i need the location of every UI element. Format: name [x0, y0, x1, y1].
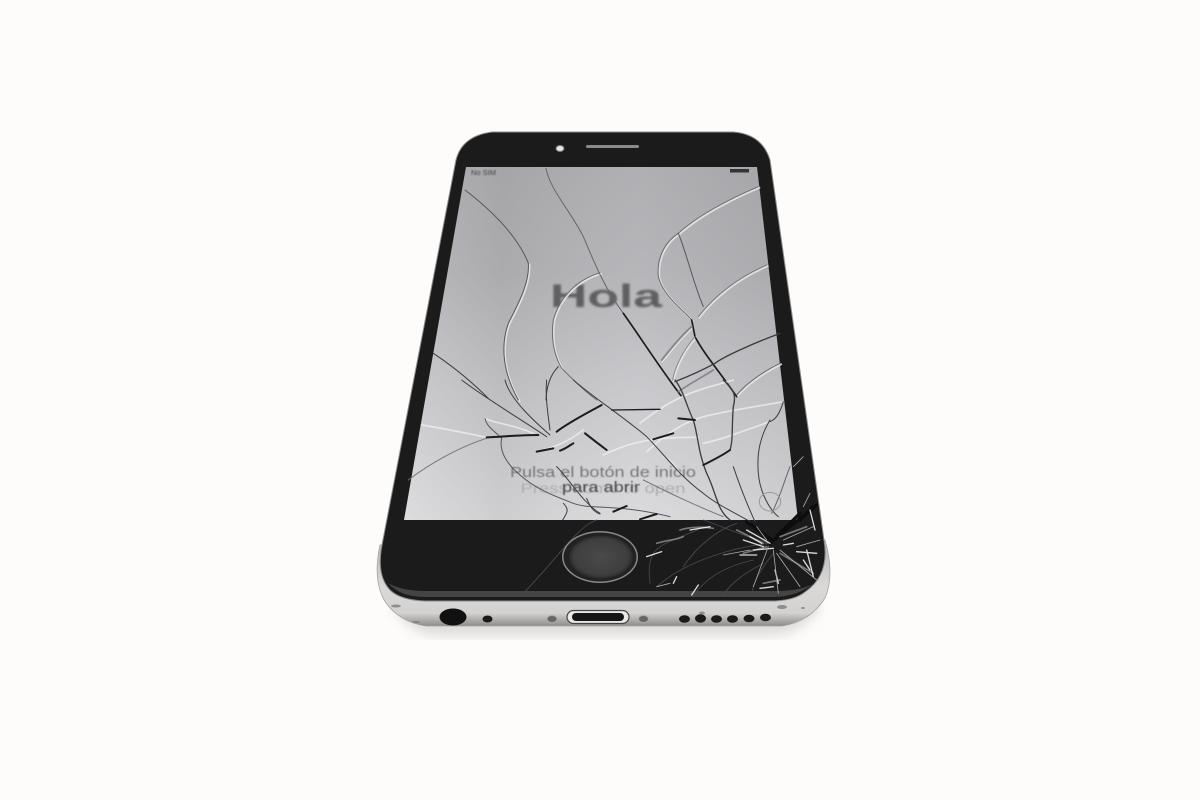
lower glass edge [388, 583, 813, 597]
unlock text line 1: Pulsa el botón de inicio [510, 464, 696, 481]
battery [730, 169, 749, 172]
cracks on lower bezel [520, 520, 773, 597]
left screw [547, 616, 557, 622]
greeting text: Hola [550, 278, 662, 314]
phone shadow [392, 600, 822, 636]
unlock text line 2: para abrir [562, 480, 640, 496]
status bar text: No SIM [471, 168, 496, 177]
dark thin cracks [408, 380, 790, 522]
headphone jack [440, 608, 466, 626]
metal body [377, 540, 830, 626]
bottom port row [391, 604, 805, 626]
cracks upper screen [433, 168, 781, 401]
microphone hole [482, 616, 492, 622]
glass front [380, 132, 825, 601]
shatter impact point [647, 457, 820, 595]
ghost unlock text: Press home to open [520, 480, 686, 496]
dark heavy cracks [487, 405, 730, 519]
charging port [567, 610, 629, 624]
screen [404, 167, 798, 520]
home button [562, 531, 638, 583]
camera [556, 146, 564, 152]
earpiece speaker [586, 145, 639, 148]
phone [377, 132, 830, 626]
speaker holes [679, 614, 771, 623]
right screw [638, 616, 648, 622]
cracks lower screen [408, 380, 790, 522]
light crack streaks [422, 380, 783, 475]
scuff marks [391, 604, 805, 623]
